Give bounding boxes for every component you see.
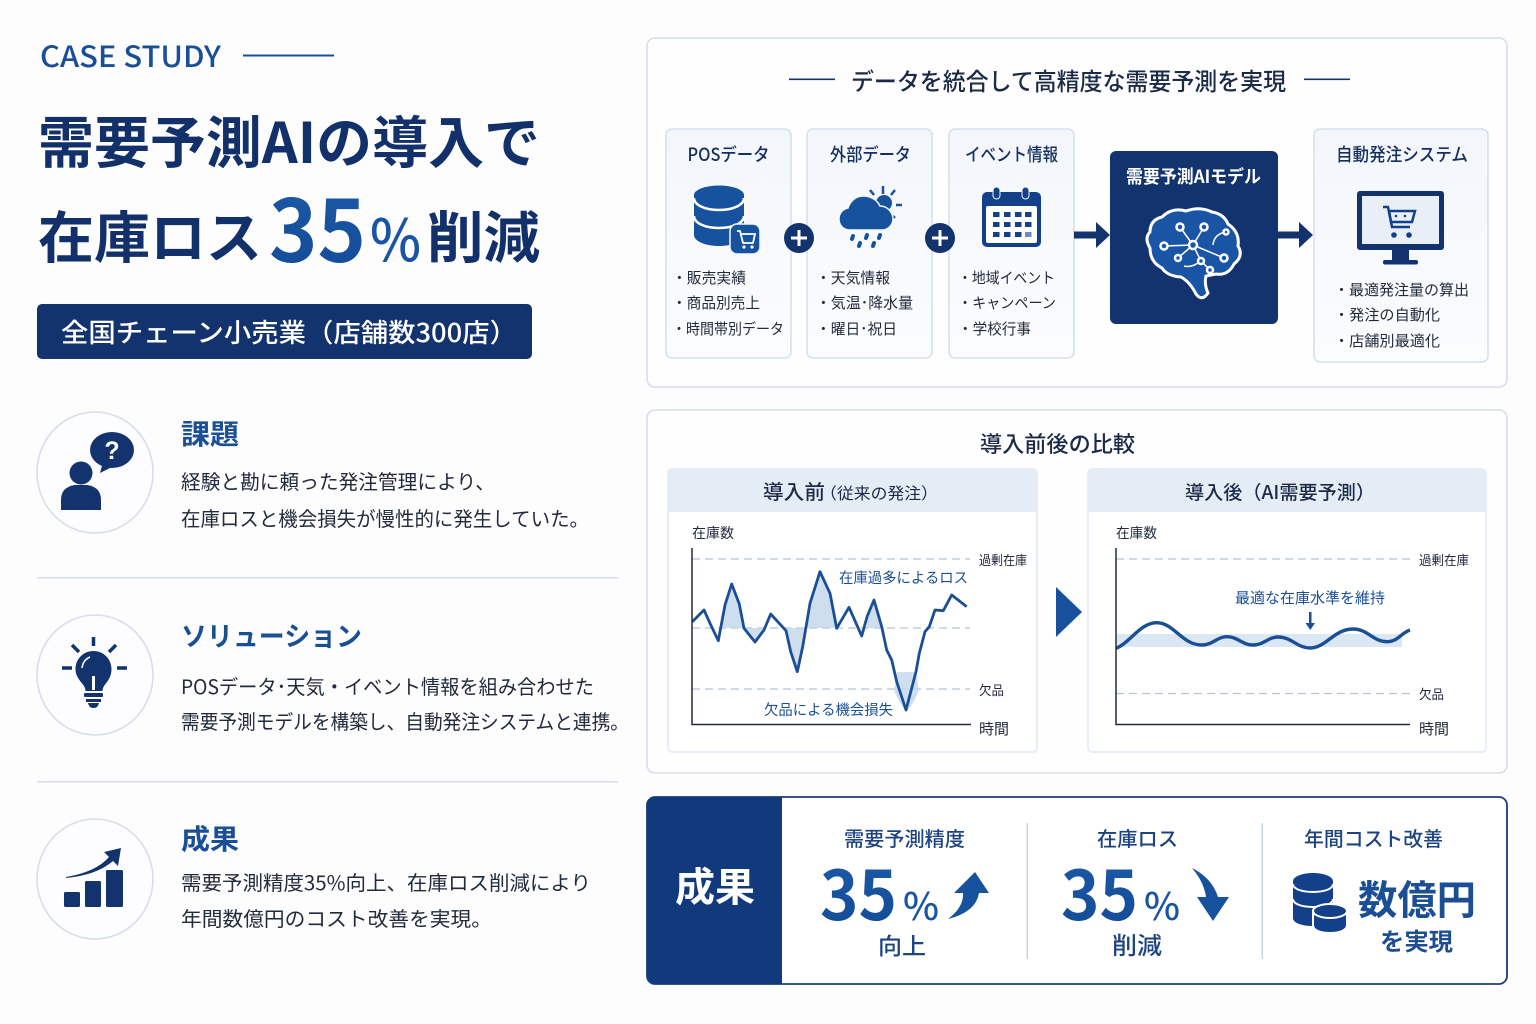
section: 課題: 課題 [181,413,239,453]
section: 成果: 成果 [181,818,239,858]
card: external data: 外部データ [830,141,911,167]
chart: after: 欠品 [1419,684,1444,703]
chart: after: 最適な在庫水準を維持 [1235,587,1385,608]
section: 成果: 年間数億円のコスト改善を実現。 [181,903,492,932]
icon: rising bar chart [64,848,123,907]
card: external data: ・気温･降水量 [816,292,913,313]
card: automated ordering: ・店舗別最適化 [1334,330,1440,351]
metric: inventory loss: % [1144,876,1180,931]
chart: after: 導入後（AI需要予測） [1185,478,1375,505]
card: POS data: ・商品別売上 [672,292,760,313]
section: 課題: 経験と勘に頼った発注管理により、 [181,466,495,495]
icon: up arrow [948,872,989,919]
metric: inventory loss: 35 [1061,841,1138,940]
card: automated ordering: 自動発注システム [1336,141,1468,167]
card: automated ordering [1314,129,1488,362]
panel: data integration flow [647,38,1507,387]
chart: before: 在庫数 [692,523,734,543]
icon: person with question bubble: ? [104,437,120,465]
main title: 在庫ロス [38,194,262,275]
icon: monitor with cart [1357,191,1444,264]
icon: plus 2 [925,223,955,253]
metric: forecast accuracy [820,823,989,961]
section: 成果: 需要予測精度35%向上、在庫ロス削減により [181,867,591,896]
chart: before: 時間 [979,718,1009,739]
chart: after: 過剰在庫 [1419,550,1469,569]
card: event info: ・地域イベント [958,267,1055,288]
arrow to ordering system [1278,222,1313,248]
icon: database with cart [694,186,760,254]
chart: after: 在庫数 [1116,523,1157,543]
section: ソリューション: POSデータ･天気・イベント情報を組み合わせた [181,671,594,700]
card: AI model: 需要予測AIモデル [1126,163,1261,189]
chart: before: （従来の発注） [820,480,938,504]
card: event info: イベント情報 [965,141,1058,167]
card: POS data [666,129,791,358]
section: 課題: 在庫ロスと機会損失が慢性的に発生していた。 [181,503,589,532]
chart: after [1088,469,1486,752]
chart: before: 過剰在庫 [979,550,1027,569]
card: automated ordering: ・発注の自動化 [1334,304,1440,325]
chart: before: 在庫過多によるロス [839,567,968,588]
metric: inventory loss [1061,823,1229,961]
metric: annual cost: 数億円 [1358,868,1476,926]
icon: coin stacks [1293,873,1347,933]
metric: forecast accuracy: 向上 [878,927,926,961]
card: POS data: ・販売実績 [672,267,746,288]
case study label: CASE STUDY [40,34,222,76]
chart: before: 欠品 [979,680,1004,699]
main title: % [370,194,421,278]
panel: before and after comparison [647,410,1507,773]
section: 課題 [37,412,589,533]
chart: after: 時間 [1419,718,1449,739]
main title: 35 [269,162,366,287]
chart: before: 欠品による機会損失 [764,699,893,720]
metric: annual cost: 年間コスト改善 [1304,823,1443,852]
section: ソリューション: ソリューション [181,615,362,654]
card: external data: ・曜日･祝日 [816,318,897,339]
chart: before: 導入前 [763,476,825,505]
card: AI model [1110,151,1278,324]
section: ソリューション: 需要予測モデルを構築し、自動発注システムと連携。 [181,706,629,735]
card: event info: ・キャンペーン [958,292,1056,313]
main title [38,99,540,287]
subtitle badge [37,304,532,359]
metric: forecast accuracy: 需要予測精度 [844,823,965,852]
panel heading: データを統合して高精度な需要予測を実現 [851,62,1286,97]
metric: forecast accuracy: 35 [820,841,897,940]
comparison heading: 導入前後の比較 [980,427,1135,459]
card: external data [807,129,932,358]
icon: down arrow [1192,868,1229,921]
metric: forecast accuracy: % [903,876,939,931]
card: external data: ・天気情報 [816,267,890,288]
metric: annual cost [1293,823,1476,957]
icon: light bulb [62,637,127,708]
section: 成果 [37,818,591,939]
subtitle badge: 全国チェーン小売業（店舗数300店） [61,313,517,350]
main title: 需要予測AIの導入で [38,99,540,180]
section: ソリューション [37,615,629,735]
arrow: before to after [1056,587,1082,637]
icon: cloud rain sun [839,186,902,246]
card: POS data: ・時間帯別データ [672,318,784,339]
icon: plus 1 [784,223,814,253]
icon: brain network [1147,209,1240,298]
icon: person with question bubble [61,432,134,510]
icon: calendar [982,187,1041,247]
chart: before [668,469,1037,752]
panel: results [647,797,1507,984]
card: automated ordering: ・最適発注量の算出 [1334,279,1469,300]
metric: inventory loss: 削減 [1112,926,1162,961]
arrow to AI model [1074,222,1110,248]
card: POS data: POSデータ [688,141,770,167]
card: event info [949,129,1074,358]
main title: 削減 [427,194,540,275]
metric: inventory loss: 在庫ロス [1097,823,1178,852]
metric: annual cost: を実現 [1380,922,1453,957]
panel: results: 成果 [675,855,755,913]
card: event info: ・学校行事 [958,318,1031,339]
